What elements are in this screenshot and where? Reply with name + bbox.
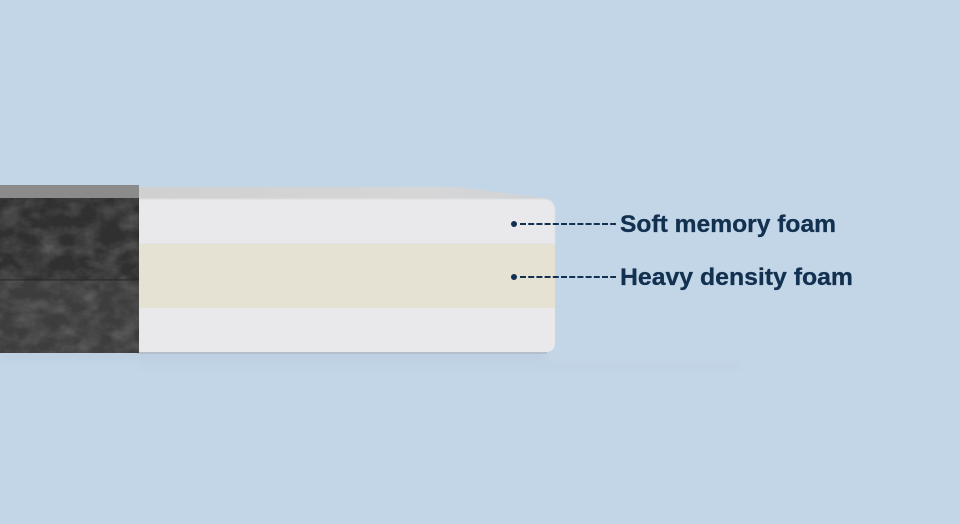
floor shadow — [0, 354, 740, 370]
callout: soft memory foam — [511, 211, 836, 238]
cover seam — [0, 280, 139, 281]
callout: heavy density foam — [511, 264, 853, 291]
soft memory foam layer — [137, 199, 555, 244]
bottom edge shadow — [137, 350, 547, 354]
label: Soft memory foam — [620, 211, 836, 238]
heavy density foam layer — [137, 244, 555, 308]
cover fabric texture — [0, 198, 139, 353]
label: Heavy density foam — [620, 264, 853, 291]
panel: foam layers — [137, 187, 555, 354]
base foam layer — [137, 308, 555, 352]
cover upper side — [0, 198, 139, 280]
marker dot — [511, 274, 517, 280]
dashed leader — [520, 223, 616, 225]
cover lower side — [0, 280, 139, 353]
dashed leader — [520, 276, 616, 278]
panel: dark mattress cover — [0, 185, 139, 353]
cover top band — [0, 185, 139, 199]
marker dot — [511, 221, 517, 227]
foam top surface — [137, 187, 548, 200]
